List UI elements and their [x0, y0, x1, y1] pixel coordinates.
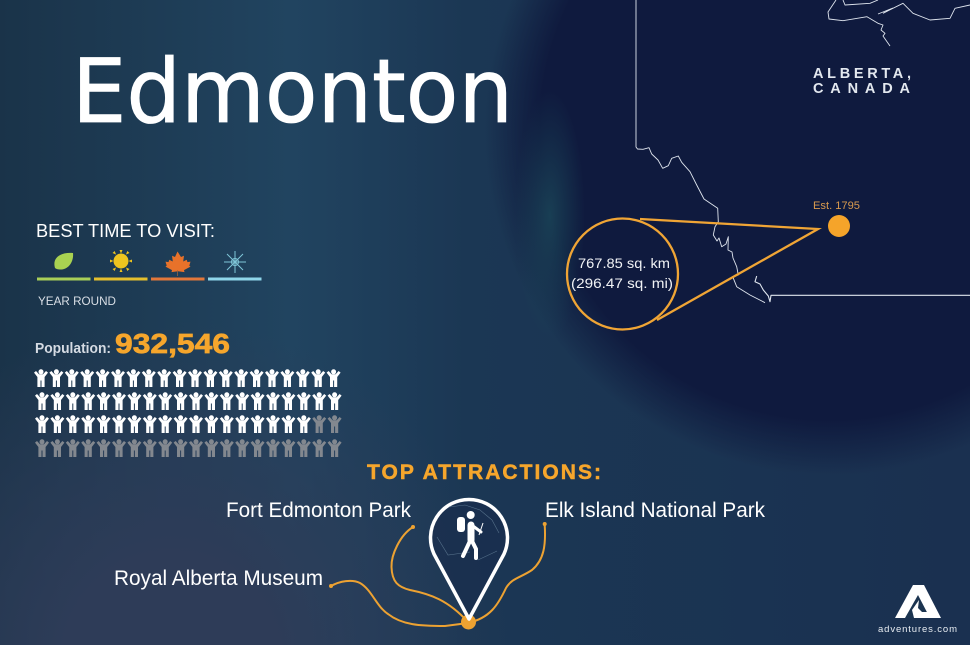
city marker: Est. 1795	[813, 200, 860, 212]
map label	[813, 66, 911, 97]
pictogram: population	[34, 369, 342, 457]
title: Edmonton	[72, 40, 513, 143]
population: Population:	[35, 340, 111, 357]
seasons	[37, 250, 262, 280]
map label: CANADA	[813, 81, 911, 97]
logo: adventures.com	[878, 585, 957, 635]
icon: map pin with hiker	[430, 499, 508, 619]
icon: maple leaf	[166, 252, 190, 276]
season bars	[37, 278, 262, 280]
area callout	[567, 218, 818, 330]
attraction labels: Fort Edmonton Park	[226, 499, 411, 522]
hiker	[457, 511, 483, 558]
text: year round: YEAR ROUND	[38, 294, 116, 308]
map of Alberta outlines	[636, 0, 970, 303]
heading: best time to visit: BEST TIME TO VISIT:	[36, 221, 215, 241]
route end dots	[329, 522, 547, 630]
area callout: 767.85 sq. km	[578, 255, 670, 271]
attraction labels	[114, 499, 765, 590]
population: 932,546	[115, 328, 230, 359]
area callout: (296.47 sq. mi)	[571, 275, 673, 291]
map label: ALBERTA,	[813, 66, 911, 82]
logo: adventures.com: adventures.com	[878, 624, 957, 635]
attraction labels: Elk Island National Park	[545, 499, 765, 522]
population	[35, 328, 230, 359]
icon: leaf	[54, 253, 73, 270]
heading: top attractions: TOP ATTRACTIONS:	[367, 461, 601, 484]
icon: snowflake	[224, 251, 246, 273]
pin map texture	[437, 505, 499, 560]
connector routes	[331, 525, 545, 626]
attraction labels: Royal Alberta Museum	[114, 567, 323, 590]
city marker	[813, 200, 860, 237]
icon: sun	[110, 250, 132, 272]
